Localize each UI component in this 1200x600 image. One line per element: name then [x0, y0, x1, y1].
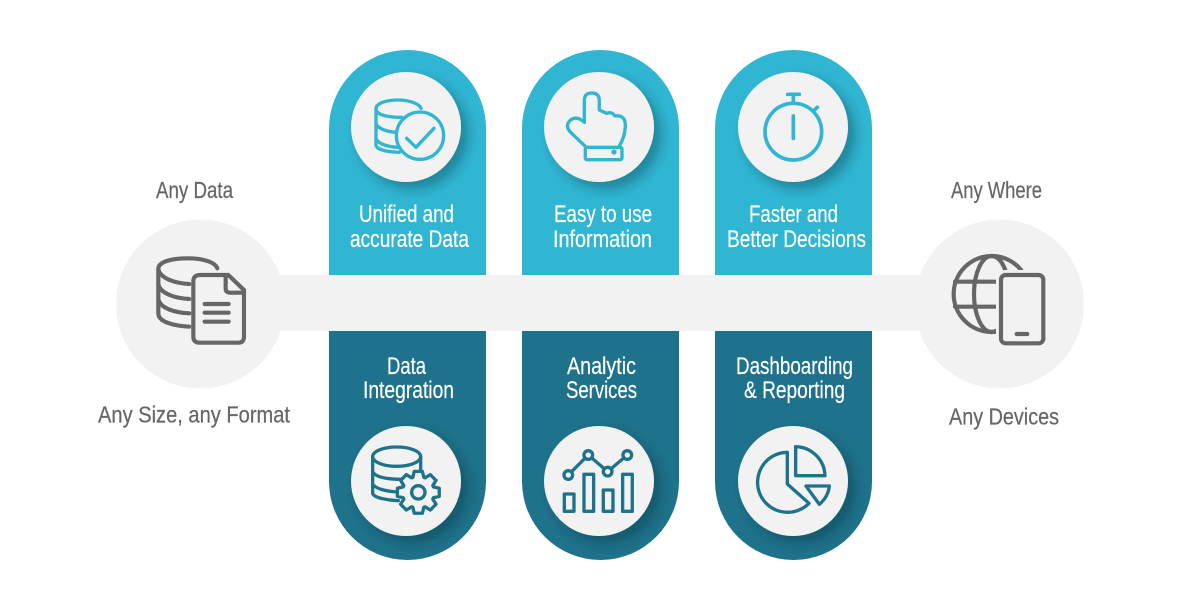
icon: stopwatch — [765, 94, 822, 160]
panel: faster and better decisions — [715, 50, 872, 275]
text: unified and accurate data — [350, 201, 470, 253]
text: dashboarding and reporting: Dashboarding — [736, 353, 853, 380]
text: data integration — [363, 353, 454, 404]
icon: database with check — [376, 100, 444, 159]
text: easy to use information: Information — [553, 226, 652, 253]
text: data integration: Data — [387, 353, 426, 380]
panel: easy to use information — [522, 50, 679, 275]
text: unified and accurate data: Unified and — [359, 201, 454, 228]
text: faster and better decisions — [727, 201, 866, 253]
icon: database with document — [158, 258, 244, 343]
panel: analytic services — [522, 331, 679, 560]
panel: any data source — [116, 177, 285, 388]
icon: pie chart — [758, 447, 829, 512]
text: any devices: Any Devices — [949, 404, 1059, 430]
text: data integration: Integration — [363, 377, 454, 404]
text: faster and better decisions: Faster and — [749, 201, 838, 228]
connecting band — [270, 275, 930, 331]
text: any size, any format: Any Size, any Format — [98, 402, 290, 428]
icon: chart with trend line — [564, 451, 632, 511]
text: dashboarding and reporting: & Reporting — [744, 377, 845, 404]
text: unified and accurate data: accurate Data — [350, 226, 470, 253]
text: any data: Any Data — [156, 177, 234, 203]
panel: dashboarding and reporting — [715, 331, 872, 560]
panel: data integration — [329, 331, 486, 560]
text: dashboarding and reporting — [736, 353, 853, 404]
panel: unified and accurate data — [329, 50, 486, 275]
icon: pointing hand — [567, 93, 625, 160]
text: analytic services: Services — [566, 377, 637, 404]
text: easy to use information: Easy to use — [554, 201, 652, 228]
icon: database with gear — [373, 447, 439, 513]
text: analytic services — [566, 353, 637, 404]
panel: any where — [915, 177, 1084, 388]
text: easy to use information — [553, 201, 652, 253]
text: any where: Any Where — [951, 177, 1042, 203]
text: analytic services: Analytic — [567, 353, 636, 380]
icon: globe with phone — [954, 256, 1043, 343]
text: faster and better decisions: Better Decisions — [727, 226, 866, 253]
